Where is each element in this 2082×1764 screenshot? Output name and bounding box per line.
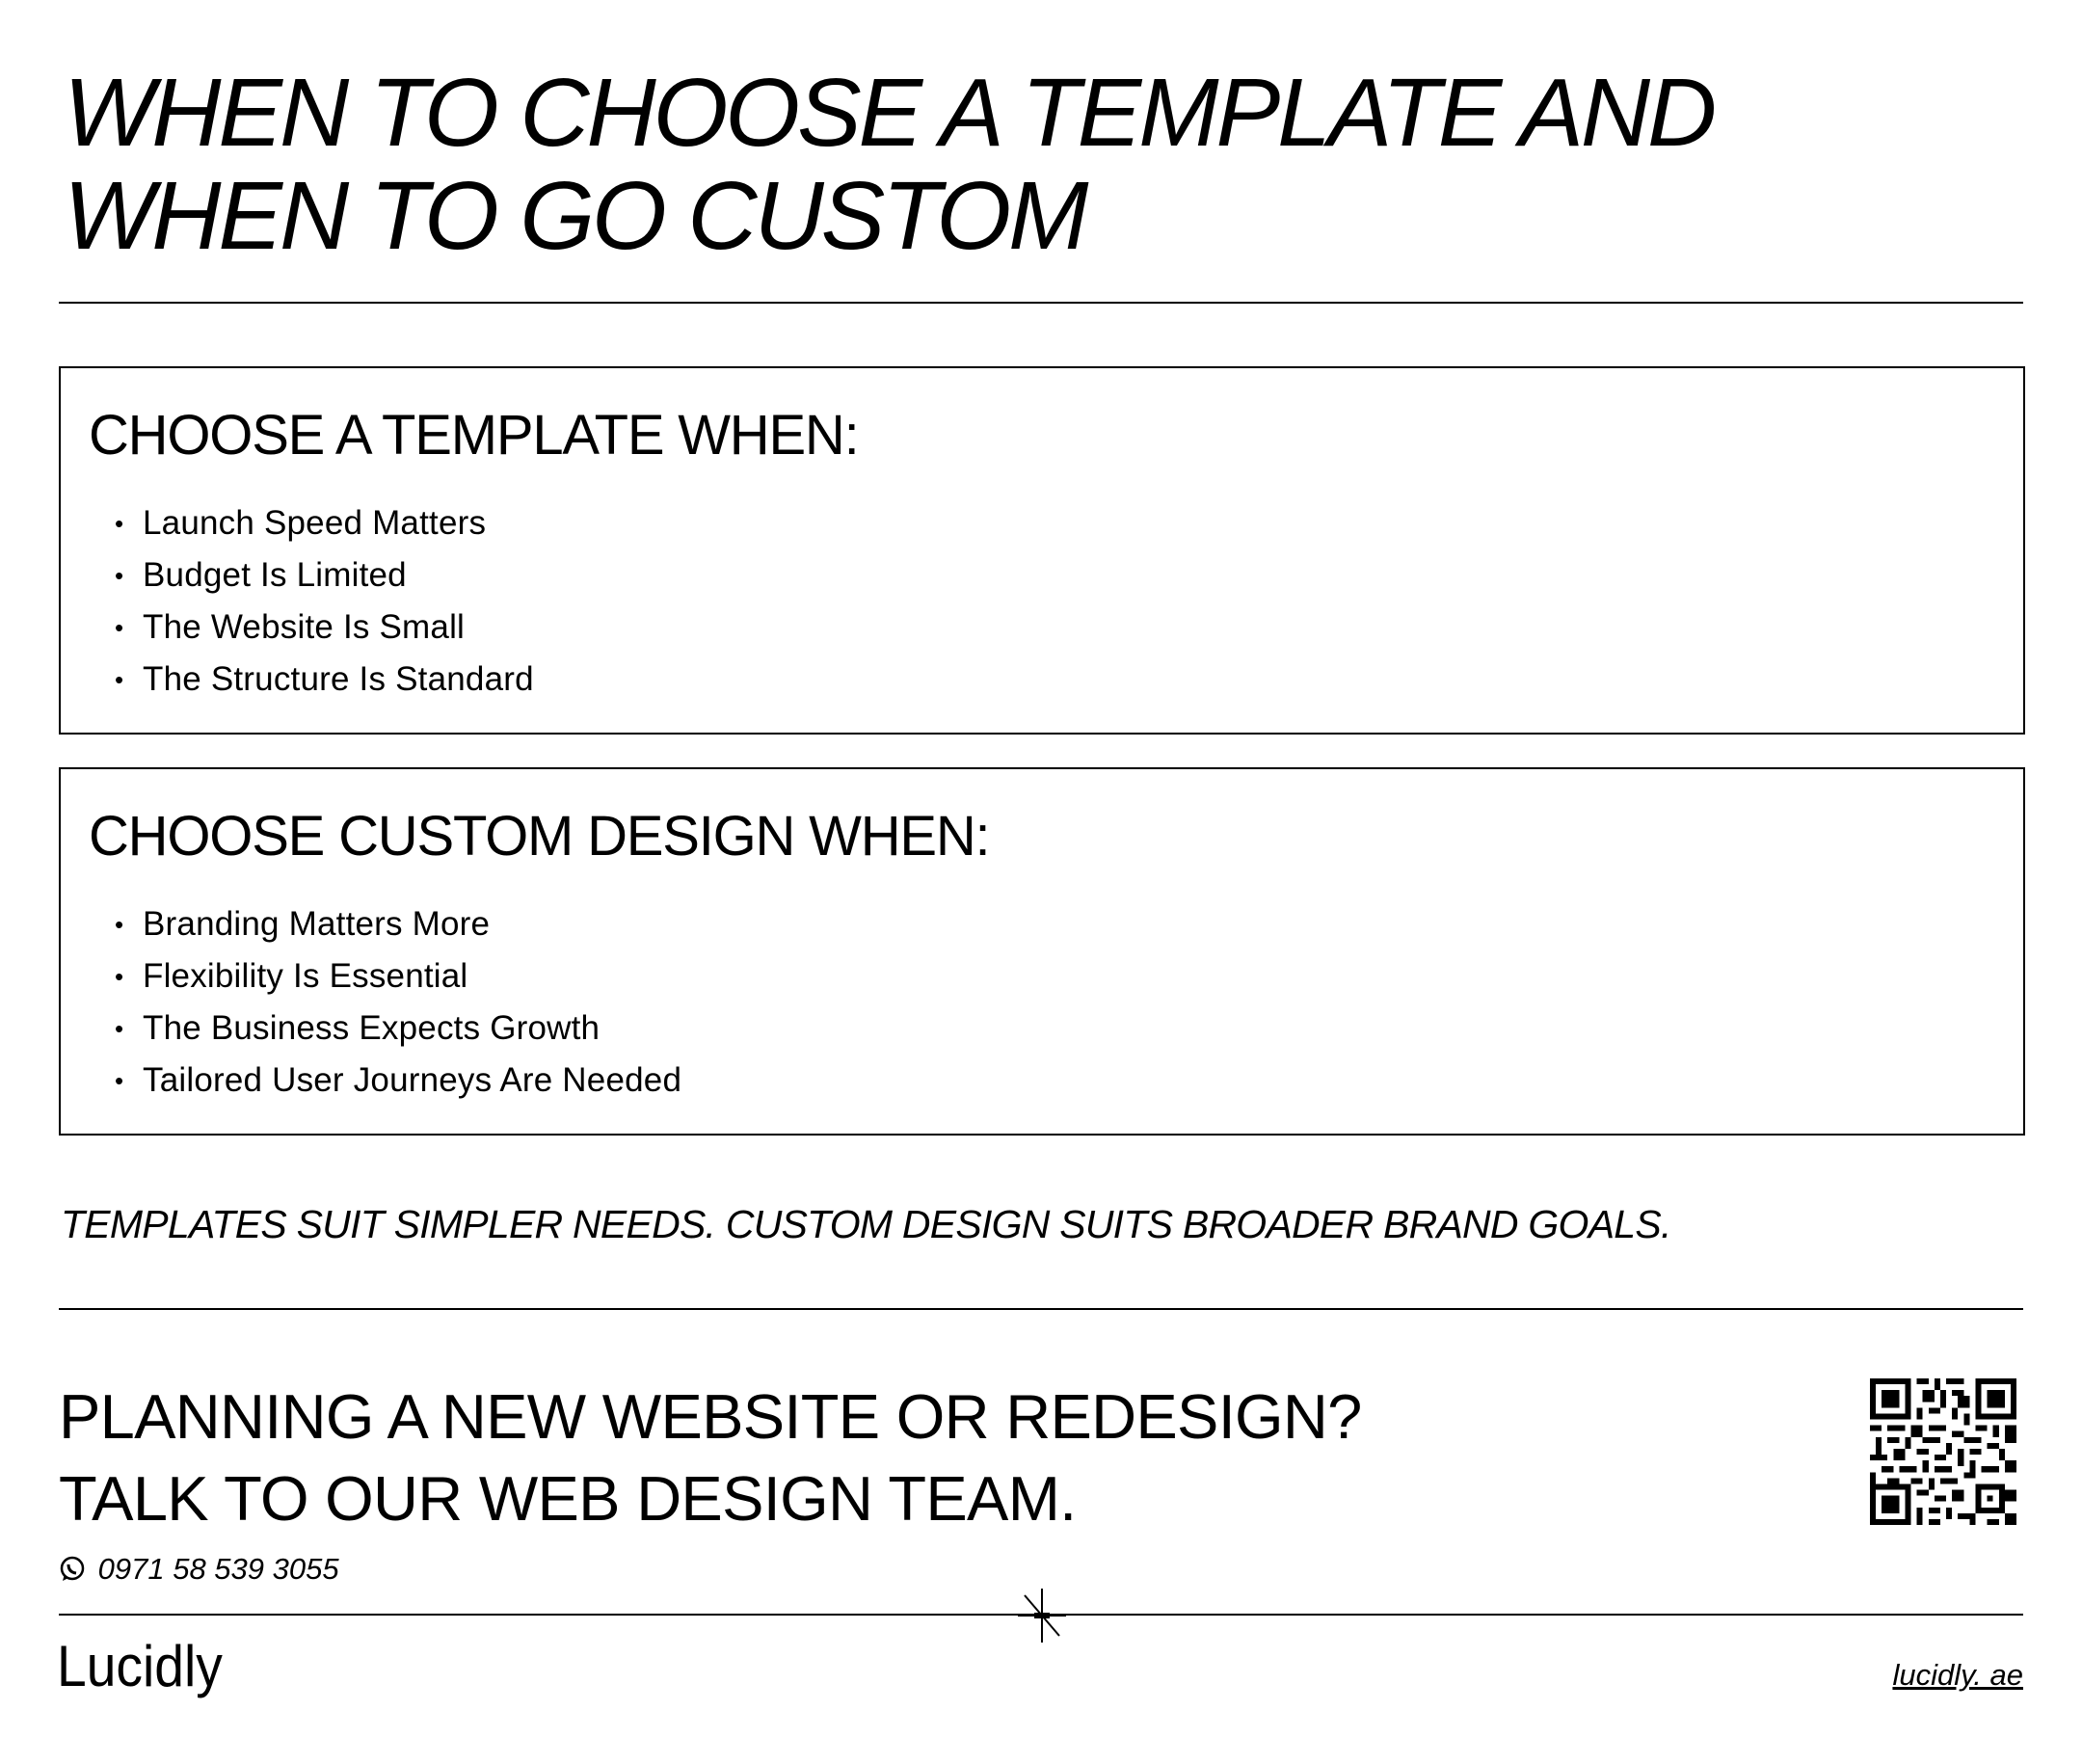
list: template reasons xyxy=(116,504,534,698)
list: custom reasons: Tailored User Journeys Are Needed xyxy=(143,1061,681,1099)
list: template reasons: The Structure Is Standard xyxy=(143,660,534,698)
list: custom reasons: Flexibility Is Essential xyxy=(143,957,467,995)
phone contact: 0971 58 539 3055 xyxy=(98,1552,339,1586)
list: custom reasons: Branding Matters More xyxy=(143,905,490,943)
icon: whatsapp xyxy=(60,1556,85,1581)
list: template reasons: Launch Speed Matters xyxy=(143,504,486,542)
list: custom reasons: The Business Expects Growth xyxy=(143,1009,600,1047)
call to action: PLANNING A NEW WEBSITE OR REDESIGN? xyxy=(59,1381,1362,1452)
heading: custom: CHOOSE CUSTOM DESIGN WHEN: xyxy=(89,805,989,868)
call to action xyxy=(59,1381,1362,1534)
list: template reasons: The Website Is Small xyxy=(143,608,465,646)
logo: Lucidly: Lucidly xyxy=(57,1634,223,1698)
summary text: TEMPLATES SUIT SIMPLER NEEDS. CUSTOM DESIGN SUITS BROADER BRAND GOALS. xyxy=(61,1202,1671,1246)
title: WHEN TO CHOOSE A TEMPLATE AND xyxy=(64,59,1714,167)
panel: custom xyxy=(59,767,2025,1136)
panel: template xyxy=(59,366,2025,735)
title: WHEN TO GO CUSTOM xyxy=(64,162,1085,270)
heading: template: CHOOSE A TEMPLATE WHEN: xyxy=(89,404,859,467)
icon: sparkle star xyxy=(1018,1589,1066,1643)
QR code xyxy=(1870,1378,2016,1525)
call to action: TALK TO OUR WEB DESIGN TEAM. xyxy=(59,1463,1077,1534)
website link: lucidly. ae xyxy=(1892,1658,2023,1692)
title xyxy=(64,59,1714,270)
list: template reasons: Budget Is Limited xyxy=(143,556,407,594)
list: custom reasons xyxy=(116,905,681,1099)
